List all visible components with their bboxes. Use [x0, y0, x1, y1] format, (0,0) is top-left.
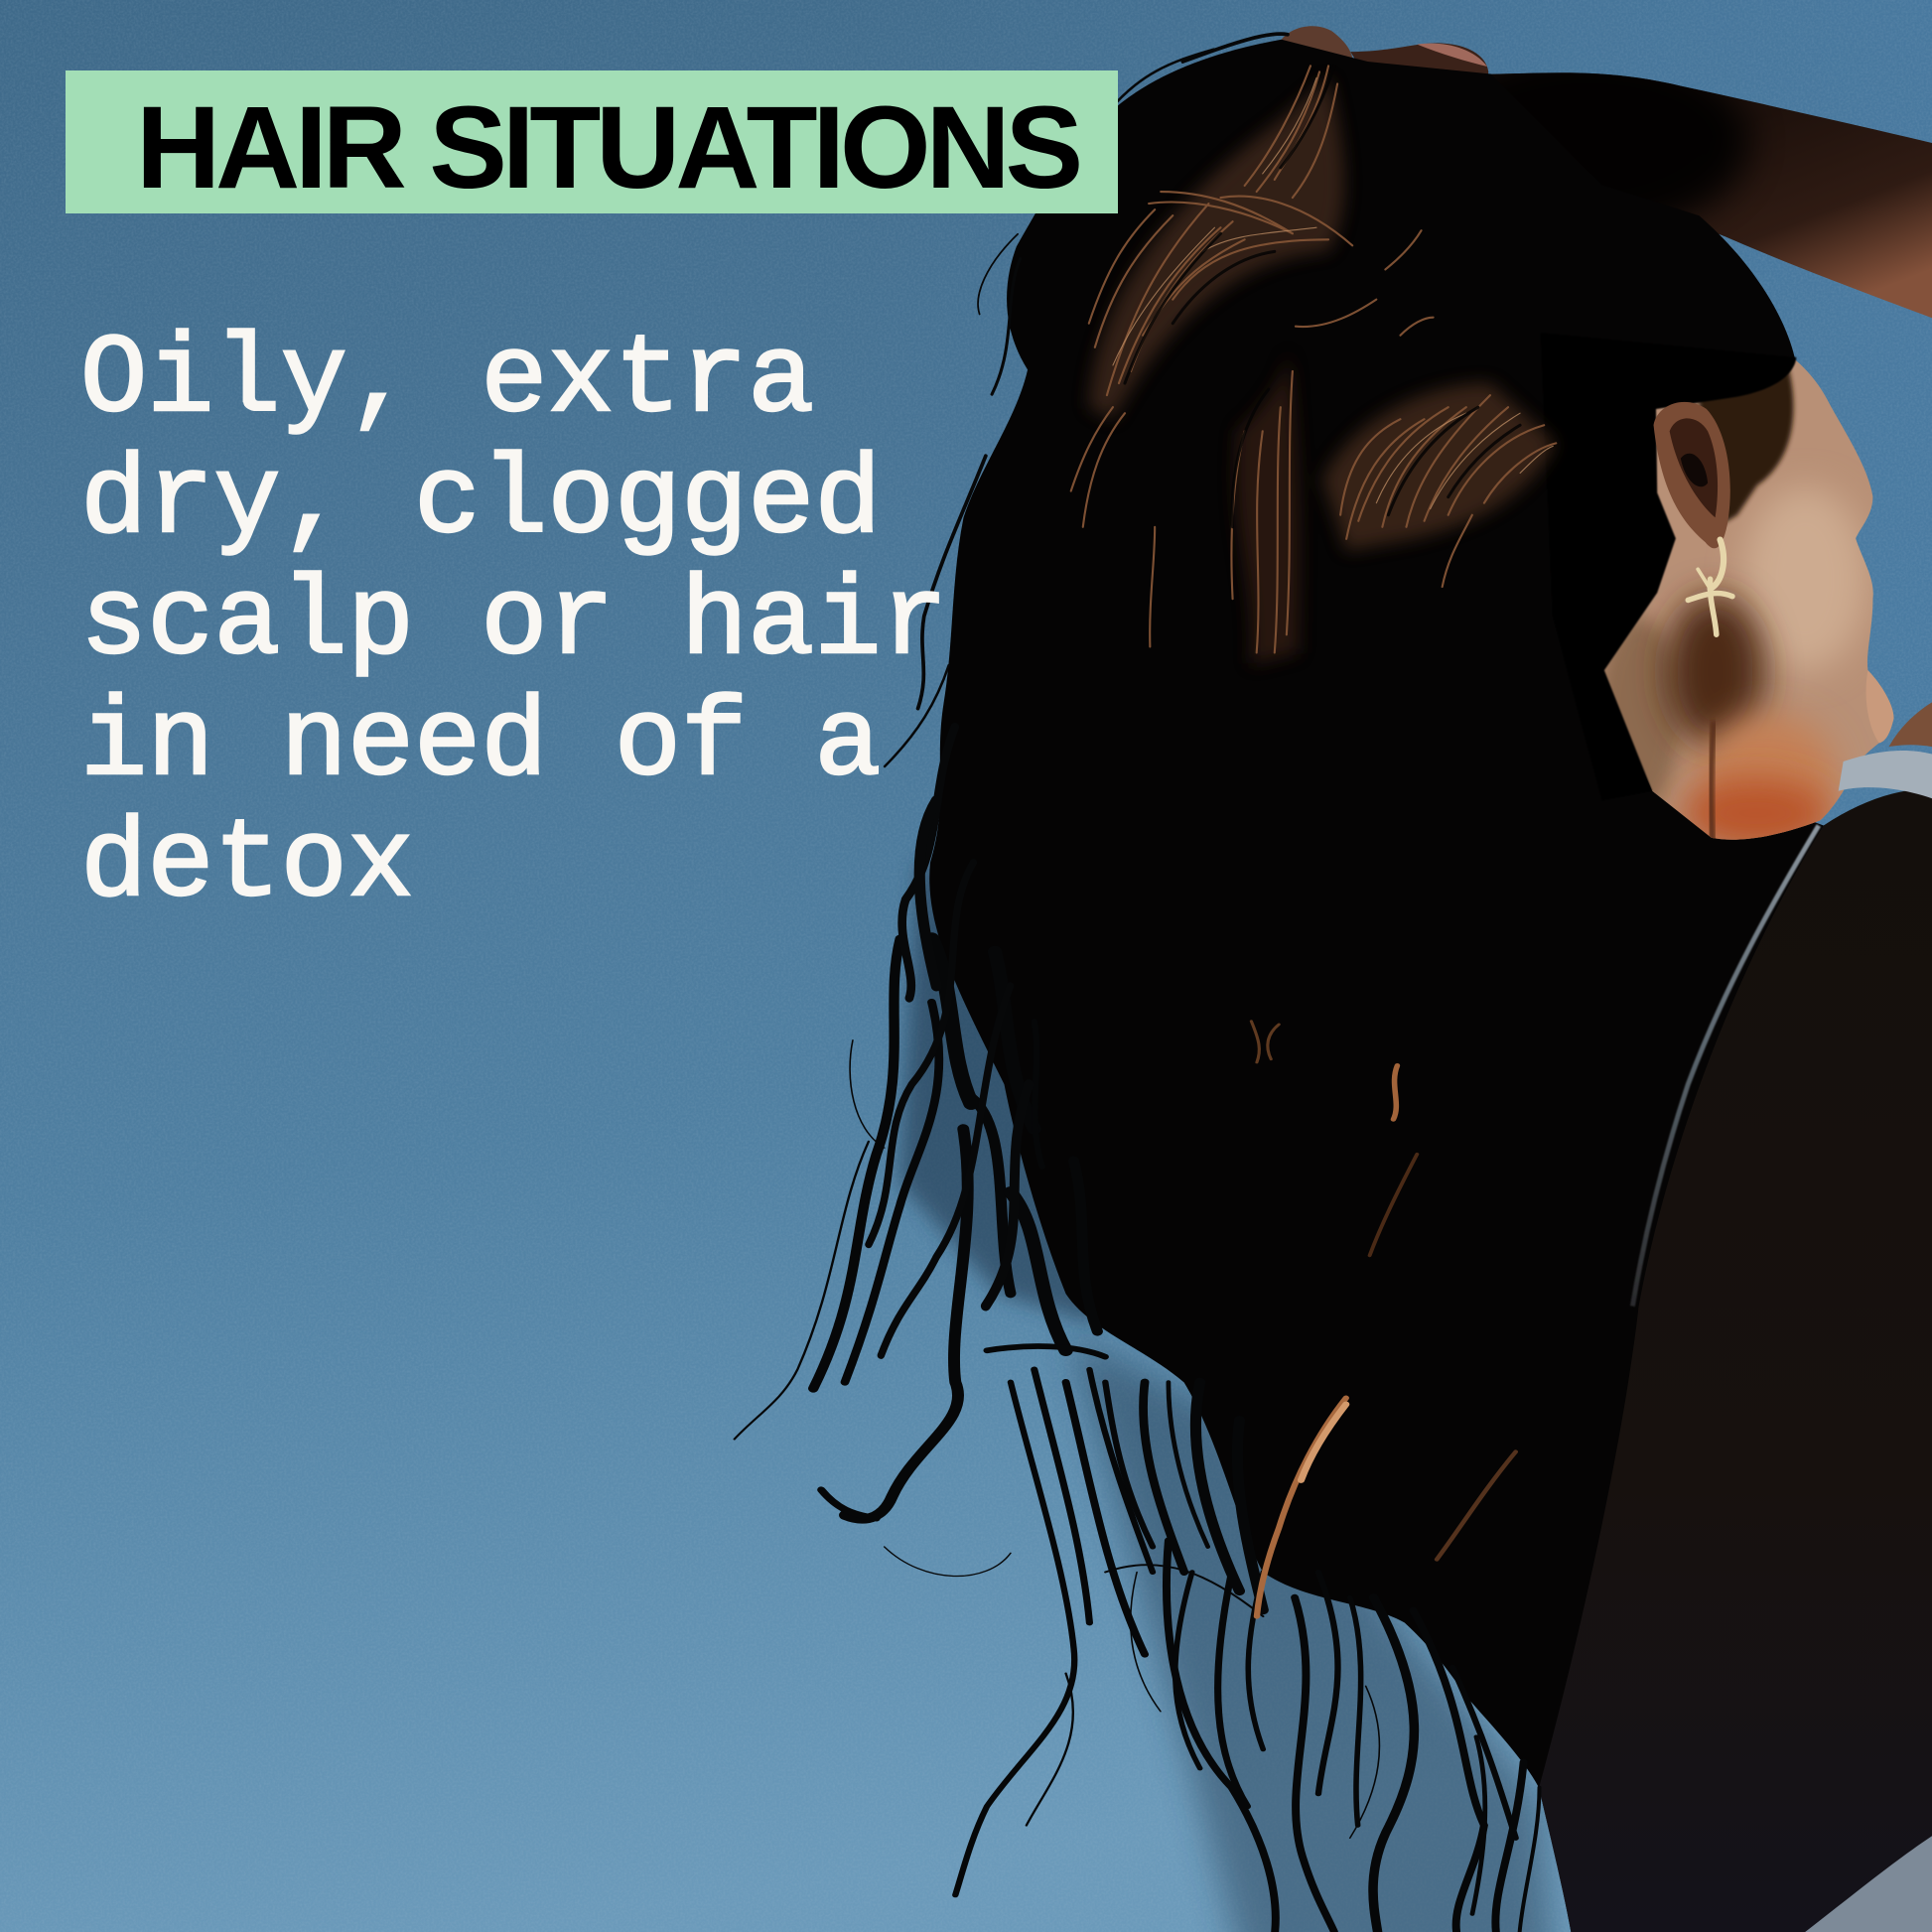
arm raised over head [1453, 72, 1932, 318]
dense wisps haze [899, 863, 1555, 1932]
bright strands in lower hair [1251, 1022, 1516, 1616]
loose hair strands lower left [735, 939, 1540, 1932]
hand at right edge [1889, 702, 1932, 747]
shirt collar [1839, 751, 1932, 798]
shirt strap line [1632, 826, 1819, 1307]
ear [1654, 402, 1730, 548]
arm shadow [1491, 72, 1758, 220]
torso [1539, 788, 1932, 1932]
icon: starfish earring [1688, 540, 1732, 634]
hair highlights on crown [1071, 66, 1556, 665]
white shirt hem [1805, 1836, 1932, 1932]
loose hair strands upper left [869, 34, 1288, 1355]
heading banner [66, 70, 1118, 213]
skin: face and neck [1603, 359, 1894, 840]
heading: HAIR SITUATIONS [136, 82, 1078, 213]
body text: Oily, extra dry, clogged scalp or hair in need of a detox [80, 318, 948, 928]
hair and body silhouette [929, 40, 1932, 1932]
hair edge around ear and neck [1540, 333, 1796, 801]
fingers on head [1282, 26, 1488, 98]
